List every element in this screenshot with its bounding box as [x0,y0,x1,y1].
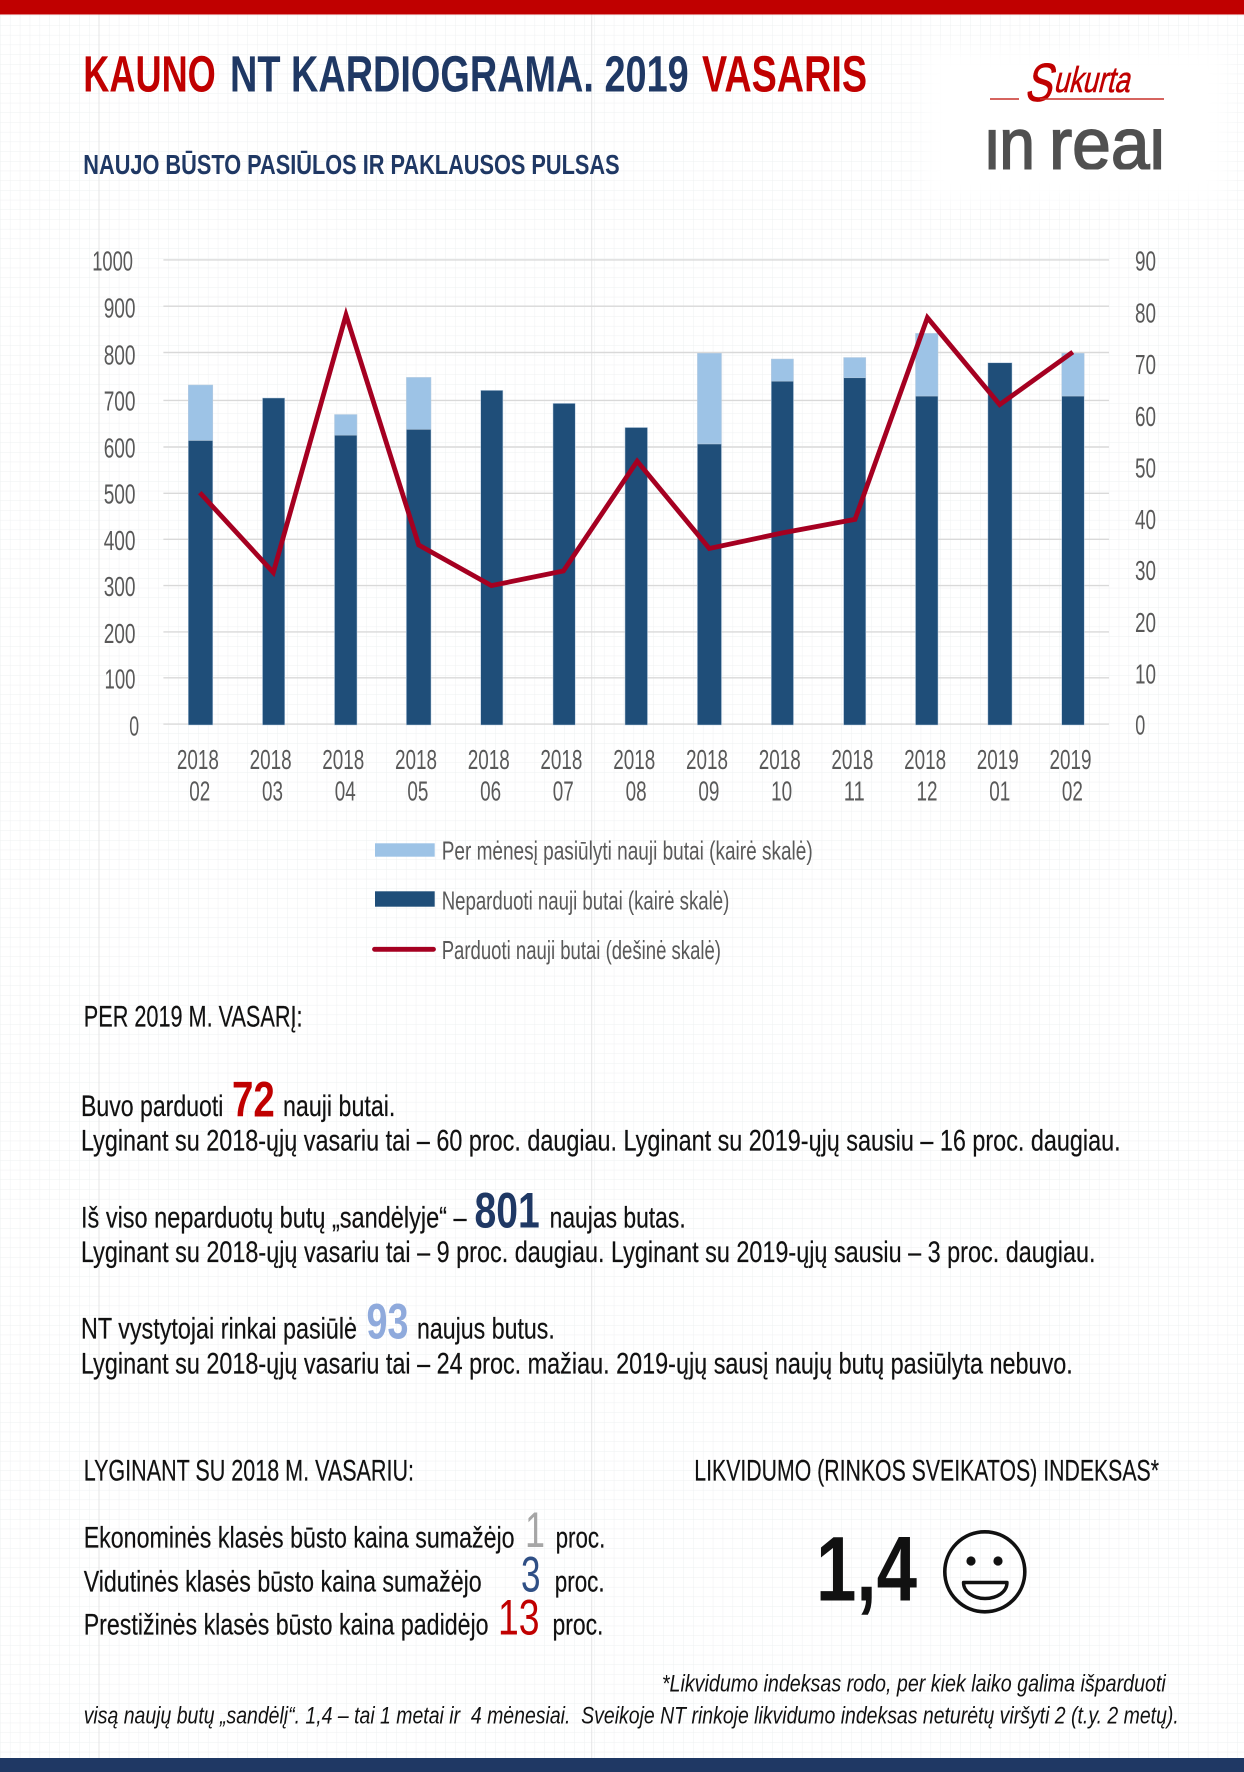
left axis labels [92,246,139,742]
text block: unsold stock: Iš viso neparduotų butų „sandėlyje“ – [81,1201,467,1234]
right axis labels: 0 [1135,710,1145,741]
logo wordmark: in real: real [1049,105,1165,185]
number: 72 sold: 72 [232,1072,275,1128]
panel: liquidity index [694,1455,1159,1621]
text block: sold: nauji butai. [283,1090,395,1123]
right axis labels: 10 [1135,658,1156,689]
left axis labels: 600 [104,432,136,463]
text block: offered [81,1294,1073,1380]
icon: smiley face [945,1532,1025,1612]
month axis labels: 2018 [904,744,946,775]
left axis labels: 200 [104,618,136,649]
top bar [0,0,1244,14]
left axis labels: 800 [104,339,136,370]
row: prestige class [84,1590,603,1646]
chart legend [374,835,813,965]
stacked bars [188,333,1084,725]
row: economy class [84,1502,605,1558]
month axis labels: 2018 [250,744,292,775]
title: KAUNO [83,46,216,103]
row: mid class [84,1546,605,1602]
text block: sold: Buvo parduoti [81,1090,223,1123]
left axis labels: 300 [104,571,136,602]
right axis labels: 50 [1135,453,1156,484]
left axis labels: 0 [129,710,139,742]
right axis labels: 80 [1135,298,1156,329]
panel: price change compared with 2018 February [84,1455,605,1646]
number: 801 unsold: 801 [474,1183,540,1239]
text block: unsold stock [81,1183,1096,1269]
row: economy class: proc. [556,1521,605,1554]
month axis labels: 12 [916,776,938,807]
number: 93 offered: 93 [366,1294,408,1350]
right axis labels [1135,246,1156,741]
month axis labels: 2018 [686,744,728,775]
text block: sold [81,1072,1121,1158]
month axis labels: 2018 [613,744,655,775]
heading: per 2019 February: PER 2019 M. VASARĮ: [84,1001,302,1034]
month axis labels: 09 [698,776,719,807]
row: economy class: 1 [525,1502,545,1558]
bottom bar [0,1758,1244,1772]
month axis labels: 2019 [1050,744,1092,775]
text block: unsold stock: naujas butas. [550,1201,686,1234]
row: mid class: Vidutinės klasės būsto kaina sumažėjo [84,1565,482,1598]
logo wordmark: in real [988,129,1162,170]
right axis labels: 20 [1135,607,1156,638]
text block: offered: NT vystytojai rinkai pasiūlė [81,1313,357,1346]
row: mid class: proc. [555,1565,605,1598]
month axis labels: 2018 [759,744,801,775]
logo script: Sukurta: ukurta [1051,60,1138,100]
row: prestige class: 13 [498,1590,540,1646]
month axis labels: 04 [335,776,356,807]
right axis labels: 90 [1135,246,1156,276]
month axis labels: 06 [480,776,501,807]
month axis labels: 2018 [468,744,510,775]
row: economy class: Ekonominės klasės būsto kaina sumažėjo [84,1521,515,1554]
month axis labels [177,744,1091,807]
left axis labels: 900 [104,293,136,324]
left axis labels: 400 [104,525,136,556]
title: VASARIS [702,46,867,103]
month axis labels: 02 [1062,776,1083,807]
row: prestige class: Prestižinės klasės būsto kaina padidėjo [84,1609,489,1642]
logo: Sukurta in real [988,63,1164,170]
logo wordmark: in real: in [985,105,1035,185]
month axis labels: 2018 [322,744,364,775]
sold apartments line [200,315,1073,586]
row: mid class: 3 [521,1546,540,1602]
month axis labels: 01 [989,776,1010,807]
month axis labels: 2018 [395,744,437,775]
footnote [84,1671,1179,1729]
left axis labels: 700 [104,386,136,417]
row: prestige class: proc. [552,1609,603,1642]
right axis labels: 30 [1135,555,1156,586]
left axis labels: 1000 [92,246,133,276]
left axis labels: 500 [104,479,136,510]
month axis labels: 2019 [977,744,1019,775]
legend: unsold [375,885,729,915]
month axis labels: 08 [626,776,647,807]
month axis labels: 2018 [540,744,582,775]
month axis labels: 05 [407,776,428,807]
right axis labels: 40 [1135,504,1156,535]
month axis labels: 10 [771,776,792,807]
left axis labels: 100 [104,664,136,695]
text block: offered: naujus butus. [417,1313,555,1346]
value: 1,4: 1,4 [816,1519,917,1621]
legend: supply: Per mėnesį pasiūlyti nauji butai (kairė skalė) [442,835,813,865]
month axis labels: 2018 [177,744,219,775]
month axis labels: 2018 [831,744,873,775]
heading: compared with February 2018: LYGINANT SU 2018 M. VASARIU: [84,1455,414,1488]
logo script: Sukurta: S [1021,52,1063,113]
legend: unsold: Neparduoti nauji butai (kairė skalė) [442,885,729,915]
month axis labels: 03 [262,776,283,807]
right axis labels: 70 [1135,349,1156,380]
month axis labels: 07 [553,776,574,807]
title: NT KARDIOGRAMA. 2019 [230,46,689,103]
month axis labels: 11 [844,776,865,807]
legend: supply [375,835,813,865]
subtitle: NAUJO BŪSTO PASIŪLOS IR PAKLAUSOS PULSAS [83,149,620,180]
month axis labels: 02 [189,776,210,807]
right axis labels: 60 [1135,401,1156,432]
legend: sold: Parduoti nauji butai (dešinė skalė) [442,935,721,965]
combo chart: new housing supply and demand [92,246,1156,807]
